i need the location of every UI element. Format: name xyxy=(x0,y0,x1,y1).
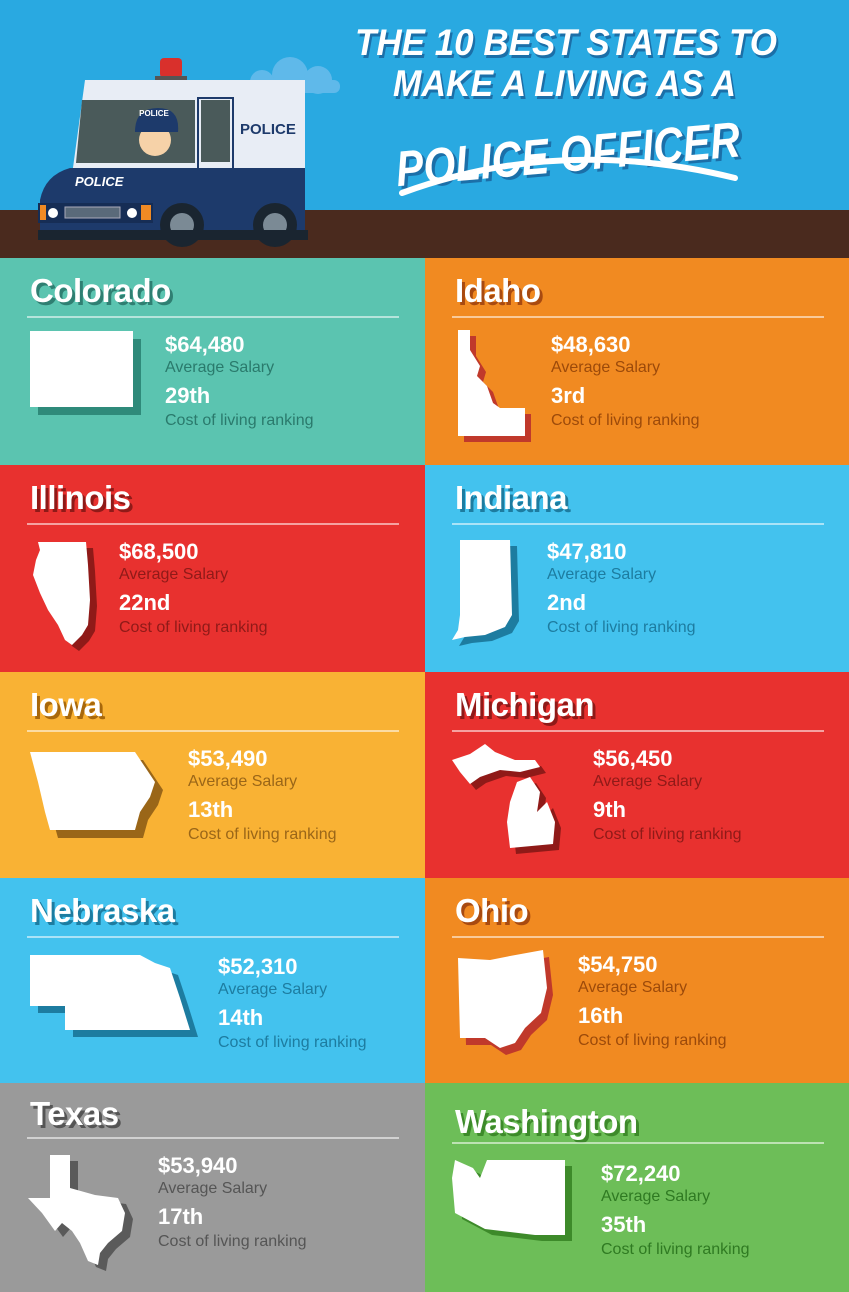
stats xyxy=(547,539,696,636)
stats: Average Salary xyxy=(188,773,297,790)
icon: Washington map xyxy=(452,1160,572,1241)
heading: Ohio xyxy=(455,892,528,929)
stats: 14th xyxy=(218,1005,263,1030)
stats: Cost of living ranking xyxy=(218,1034,367,1051)
stats: Average Salary xyxy=(547,566,656,583)
stats: $53,940 xyxy=(158,1153,238,1178)
stats: 2nd xyxy=(547,590,586,615)
icon: Nebraska map xyxy=(30,955,198,1037)
stats xyxy=(593,746,742,843)
stats xyxy=(551,332,700,429)
panel: Idaho xyxy=(425,258,849,465)
heading: Indiana xyxy=(455,479,567,516)
stats: $64,480 xyxy=(165,332,245,357)
icon: police van: POLICE xyxy=(139,109,170,118)
stats: Cost of living ranking xyxy=(119,619,268,636)
stats: Average Salary xyxy=(218,981,327,998)
stats: $54,750 xyxy=(578,952,658,977)
stats: $53,490 xyxy=(188,746,268,771)
stats: Average Salary xyxy=(551,359,660,376)
title: MAKE A LIVING AS A xyxy=(393,63,736,104)
stats: $48,630 xyxy=(551,332,631,357)
stats: 22nd xyxy=(119,590,170,615)
panel: Colorado xyxy=(0,258,425,465)
title xyxy=(355,22,779,200)
header xyxy=(0,0,849,258)
ground xyxy=(0,210,849,258)
stats: 29th xyxy=(165,383,210,408)
stats: Average Salary xyxy=(601,1188,710,1205)
stats: Cost of living ranking xyxy=(188,826,337,843)
title: MAKE A LIVING AS A xyxy=(395,66,738,107)
heading: Nebraska xyxy=(30,892,175,929)
icon: police van xyxy=(38,58,308,247)
stats: Cost of living ranking xyxy=(593,826,742,843)
title: THE 10 BEST STATES TO xyxy=(357,25,779,66)
stats xyxy=(158,1153,307,1250)
heading: Illinois xyxy=(30,479,131,516)
icon: police van: POLICE xyxy=(75,174,124,189)
icon: Michigan map xyxy=(452,744,561,854)
stats: Average Salary xyxy=(165,359,274,376)
heading: Idaho xyxy=(455,272,540,309)
stats xyxy=(218,954,367,1051)
stats xyxy=(601,1161,750,1258)
heading: Washington xyxy=(455,1103,638,1140)
stats: $47,810 xyxy=(547,539,627,564)
panel: Washington xyxy=(425,1083,849,1292)
panel: Ohio xyxy=(425,878,849,1083)
panel: Nebraska xyxy=(0,878,425,1083)
stats xyxy=(119,539,268,636)
panel: Indiana xyxy=(425,465,849,672)
stats: Cost of living ranking xyxy=(551,412,700,429)
stats: Average Salary xyxy=(119,566,228,583)
stats: Cost of living ranking xyxy=(165,412,314,429)
icon: Colorado map xyxy=(30,331,141,415)
stats: 17th xyxy=(158,1204,203,1229)
stats: Cost of living ranking xyxy=(158,1233,307,1250)
title: POLICE OFFICER xyxy=(397,114,745,200)
stats xyxy=(165,332,314,429)
panel: Texas xyxy=(0,1083,425,1292)
stats: $68,500 xyxy=(119,539,199,564)
stats xyxy=(578,952,727,1049)
heading: Iowa xyxy=(30,686,101,723)
icon: Iowa map xyxy=(30,752,163,838)
heading: Colorado xyxy=(30,272,171,309)
stats: $56,450 xyxy=(593,746,673,771)
title: POLICE OFFICER xyxy=(394,111,742,197)
panel: Michigan xyxy=(425,672,849,878)
stats: Cost of living ranking xyxy=(601,1241,750,1258)
icon: Illinois map xyxy=(33,542,97,651)
stats: Cost of living ranking xyxy=(547,619,696,636)
icon: Texas map xyxy=(28,1155,133,1271)
stats: 13th xyxy=(188,797,233,822)
stats: 3rd xyxy=(551,383,585,408)
stats: $52,310 xyxy=(218,954,298,979)
heading: Texas xyxy=(30,1095,119,1132)
icon: Idaho map xyxy=(458,330,531,442)
stats: 35th xyxy=(601,1212,646,1237)
icon: Ohio map xyxy=(458,950,553,1055)
icon: police van: POLICE xyxy=(240,121,296,138)
stats: Cost of living ranking xyxy=(578,1032,727,1049)
stats: 9th xyxy=(593,797,626,822)
icon: Indiana map xyxy=(452,540,519,646)
stats xyxy=(188,746,337,843)
title: THE 10 BEST STATES TO xyxy=(355,22,777,63)
stats: $72,240 xyxy=(601,1161,681,1186)
stats: 16th xyxy=(578,1003,623,1028)
stats: Average Salary xyxy=(578,979,687,996)
panel: Illinois xyxy=(0,465,425,672)
panel: Iowa xyxy=(0,672,425,878)
stats: Average Salary xyxy=(593,773,702,790)
icon: cloud xyxy=(250,57,340,94)
heading: Michigan xyxy=(455,686,594,723)
stats: Average Salary xyxy=(158,1180,267,1197)
